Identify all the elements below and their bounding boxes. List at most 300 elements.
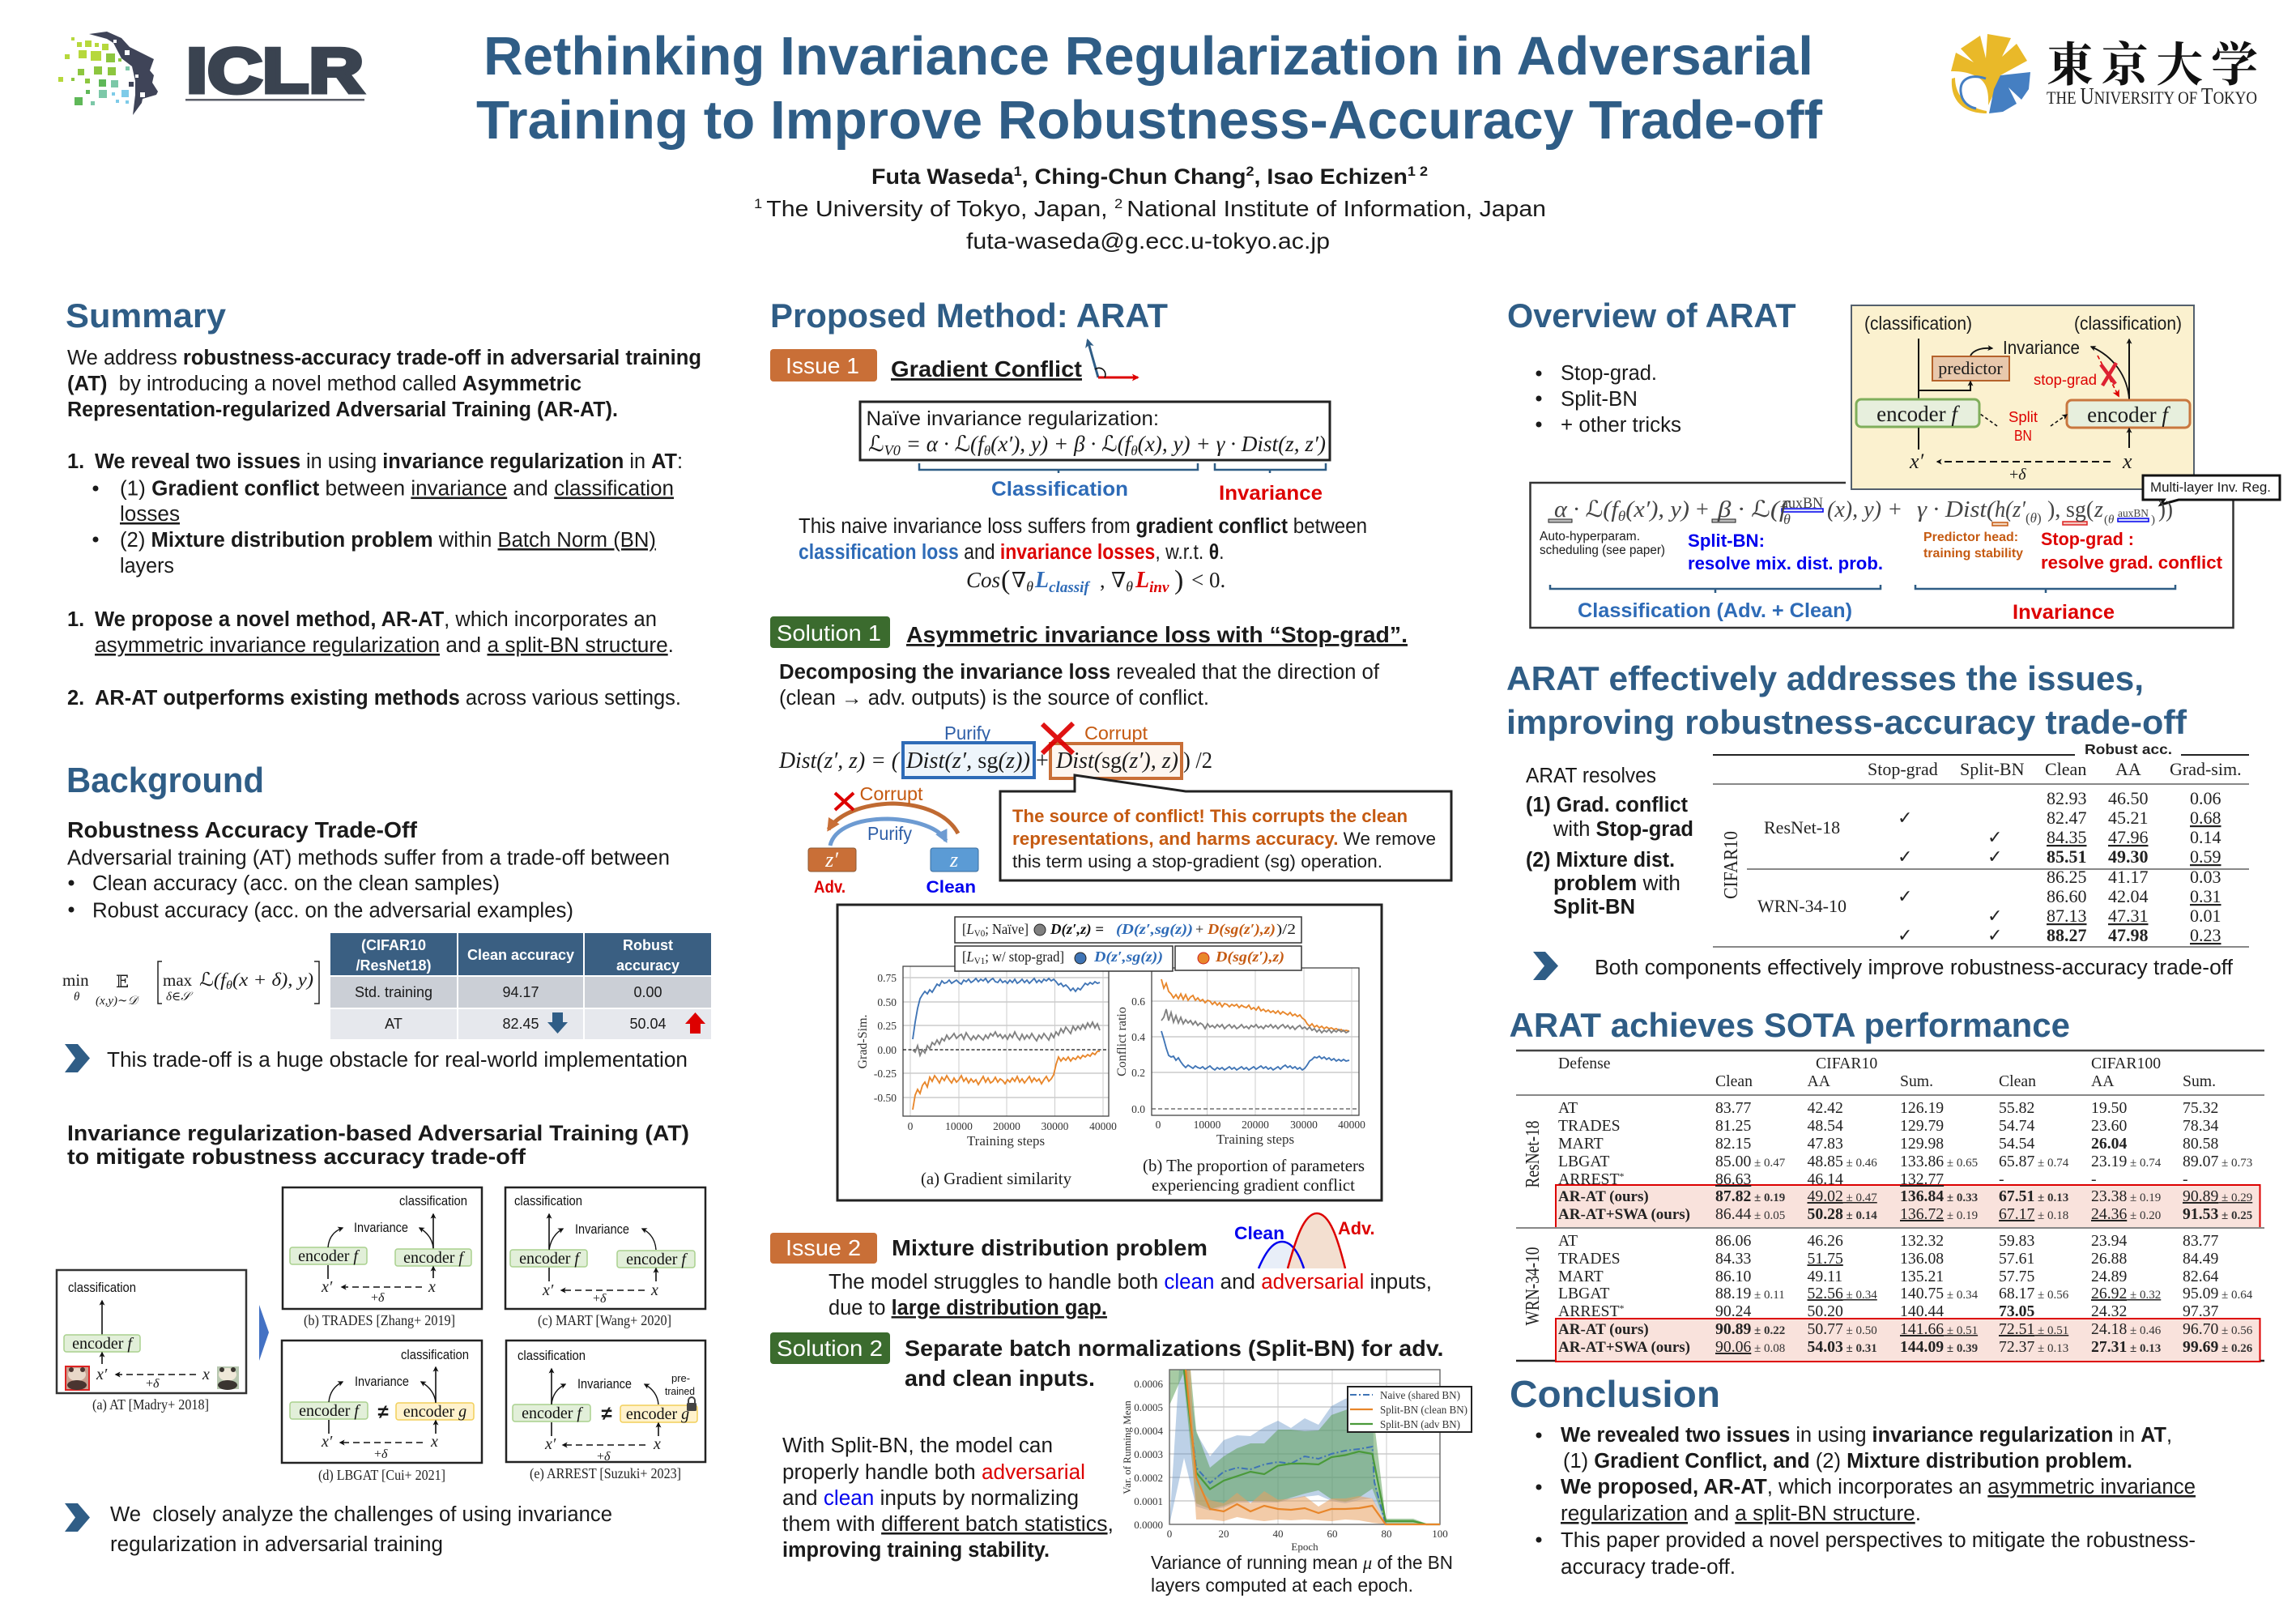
icon: conflicting gradients bbox=[1088, 340, 1138, 377]
authors: 1 bbox=[1014, 164, 1022, 179]
heading: proposed method: Proposed Method: ARAT bbox=[770, 296, 1168, 335]
chart: gradient similarity: 0.25 bbox=[877, 1020, 897, 1032]
diagram: ARAT architecture: stop-grad bbox=[2034, 372, 2097, 388]
text: gradient conflict explanation: classification loss and invariance losses, w.r.t. θ. bbox=[799, 541, 1225, 564]
table: SOTA results: 51.75 bbox=[1808, 1250, 1843, 1268]
chart: gradient similarity: 0.75 bbox=[877, 972, 897, 984]
diagram: ARAT architecture: predictor bbox=[1938, 358, 2003, 378]
text: split-bn description: With Split-BN, the model can bbox=[782, 1434, 1053, 1457]
table: ablation: 0.03 bbox=[2190, 867, 2221, 887]
formula box bbox=[1531, 483, 2234, 628]
table: SOTA results: 48.54 bbox=[1808, 1117, 1843, 1135]
callout: source of conflict: this term using a stop-gradient (sg) operation. bbox=[1012, 851, 1382, 872]
text: ARAT resolves: (2) Mixture dist. bbox=[1526, 849, 1675, 872]
table: SOTA results: ± 0.20 bbox=[2127, 1209, 2161, 1222]
diagram: corrupt and purify: Adv. bbox=[814, 878, 846, 897]
icon: clean and adversarial distributions bbox=[1234, 1213, 1375, 1268]
icon: chevron bbox=[65, 1503, 90, 1532]
text: summary body: 1. bbox=[67, 608, 84, 631]
table: clean vs robust accuracy: (CIFAR10 bbox=[361, 937, 426, 953]
diagram: (b) TRADES: encoder f bbox=[298, 1247, 360, 1265]
text: summary body: asymmetric invariance regularization and a split-BN structure . bbox=[95, 634, 674, 657]
table: SOTA results: LBGAT bbox=[1558, 1285, 1609, 1302]
formula: ARAT loss: ) bbox=[2151, 514, 2155, 526]
diagram: ARAT architecture bbox=[1851, 305, 2194, 489]
diagram: corrupt and purify: Purify bbox=[867, 823, 912, 844]
note: stop-grad: Stop-grad : bbox=[2041, 529, 2134, 549]
table: ablation: 42.04 bbox=[2108, 886, 2148, 906]
table: SOTA results: 140.75 ± 0.34 bbox=[1900, 1285, 1978, 1302]
formula: adversarial training objective: min bbox=[62, 970, 89, 990]
formula box: naive invariance regularization bbox=[860, 402, 1330, 460]
formula: ARAT loss bbox=[1548, 495, 2173, 527]
text: split-bn description: them with different batch statistics , bbox=[782, 1513, 1114, 1536]
formula: ARAT loss: γ · Dist( bbox=[1917, 497, 1996, 522]
list: tricks: Stop-grad. bbox=[1561, 362, 1657, 385]
diagram: (a) AT: (a) AT [Madry+ 2018] bbox=[92, 1396, 209, 1413]
note: stop-grad: resolve grad. conflict bbox=[2041, 552, 2223, 573]
text: ARAT resolves: (1) Grad. conflict bbox=[1526, 794, 1688, 816]
table: SOTA results: 19.50 bbox=[2091, 1099, 2127, 1117]
table: ablation: Split-BN bbox=[1960, 759, 2025, 779]
table: ablation: 0.01 bbox=[2190, 906, 2221, 926]
formula: cosine similarity: < 0. bbox=[1191, 568, 1225, 592]
text: trade-off description: Clean accuracy (acc. on the clean samples) bbox=[92, 872, 500, 895]
text: decomposition: (clean → adv. outputs) is the source of conflict. bbox=[779, 687, 1209, 710]
panel: effectiveness bbox=[1506, 659, 2249, 980]
formula: ARAT loss: auxBN bbox=[2118, 508, 2149, 520]
legend: BN variants: Split-BN (clean BN) bbox=[1380, 1404, 1467, 1416]
formula: ARAT loss: h(z′ bbox=[1995, 497, 2026, 522]
formula: decomposition of distance: ) /2 bbox=[1183, 748, 1212, 774]
diagram: (e) ARREST: encoder f bbox=[522, 1404, 583, 1422]
text: ARAT resolves: Split-BN bbox=[1553, 896, 1635, 919]
chart: conflict ratio: 0.2 bbox=[1131, 1067, 1145, 1079]
panel: overview bbox=[1507, 296, 2280, 628]
icon: red cross bbox=[1042, 723, 1073, 753]
text: gradient conflict explanation bbox=[799, 515, 1367, 564]
diagram: (c) MART: x bbox=[650, 1281, 658, 1299]
table: ablation: 84.35 bbox=[2047, 827, 2086, 847]
diagram: (a) AT bbox=[57, 1270, 246, 1413]
table: SOTA results: 86.10 bbox=[1715, 1268, 1751, 1285]
caption: variance chart: Variance of running mean μ of the BN bbox=[1151, 1552, 1453, 1573]
list: tricks: + other tricks bbox=[1561, 414, 1681, 437]
label: invariance: Invariance bbox=[2013, 601, 2115, 624]
authors: 1 2 bbox=[1408, 164, 1428, 179]
note: auto-hyperparameter: Auto-hyperparam. bbox=[1540, 530, 1640, 543]
table: SOTA results: 24.89 bbox=[2091, 1268, 2127, 1285]
diagram: (c) MART: classification bbox=[514, 1194, 582, 1208]
text: summary body: Representation-regularized Adversarial Training (AR-AT). bbox=[67, 399, 618, 421]
panel: SOTA performance bbox=[1510, 1006, 2264, 1362]
badge: solution 1 bbox=[770, 616, 890, 648]
legend: naive and stop-grad terms: D(sg(z′),z) bbox=[1215, 948, 1284, 965]
callout: multi-layer invariance regularization: Multi-layer Inv. Reg. bbox=[2150, 480, 2271, 495]
table: SOTA results: 68.17 ± 0.56 bbox=[1999, 1285, 2068, 1302]
table: SOTA results: - bbox=[2183, 1170, 2188, 1188]
formula: adversarial training objective: (x,y)∼𝒟 bbox=[96, 995, 140, 1008]
table: SOTA results: 132.77 bbox=[1900, 1170, 1944, 1188]
text: decomposition bbox=[779, 661, 1380, 710]
table: SOTA results: 97.37 bbox=[2183, 1302, 2218, 1320]
note: predictor head bbox=[1923, 531, 2023, 561]
arrow: triangle bbox=[259, 1305, 269, 1361]
formula: ARAT loss: θ bbox=[1783, 511, 1791, 527]
table: SOTA results: - bbox=[1999, 1170, 2004, 1188]
text: analysis statement: We closely analyze the challenges of using invariance bbox=[110, 1503, 612, 1526]
diagram: (e) ARREST bbox=[506, 1341, 705, 1482]
table: SOTA results: AT bbox=[1558, 1232, 1578, 1250]
table: clean vs robust accuracy: accuracy bbox=[616, 957, 679, 974]
table: ablation: 86.25 bbox=[2047, 867, 2086, 887]
formula: ARAT loss: θ bbox=[1618, 508, 1625, 524]
diagram: (c) MART: +δ bbox=[593, 1292, 607, 1306]
table: SOTA results: 72.51 ± 0.51 bbox=[1999, 1320, 2068, 1338]
chart: conflict ratio: 30000 bbox=[1290, 1119, 1318, 1131]
diagram: corrupt and purify: z′ bbox=[824, 848, 838, 872]
table: SOTA results: 75.32 bbox=[2183, 1099, 2218, 1117]
badge: issue 2 bbox=[770, 1233, 877, 1264]
table: SOTA results: ResNet-18 bbox=[1523, 1121, 1544, 1187]
table: SOTA results: AT bbox=[1558, 1099, 1578, 1117]
table: ablation: 85.51 bbox=[2047, 846, 2086, 867]
diagram: (e) ARREST: +δ bbox=[597, 1450, 611, 1464]
brace: invariance bbox=[1915, 585, 2175, 593]
logo: University of Tokyo: THE UNIVERSITY OF TOKYO bbox=[2047, 84, 2257, 109]
formula: ARAT loss: auxBN bbox=[1782, 495, 1823, 512]
formula box: naive invariance regularization: Naïve invariance regularization: bbox=[867, 407, 1159, 430]
formula: cosine similarity: ) bbox=[1174, 565, 1183, 595]
diagram: ARAT architecture: encoder f bbox=[2087, 403, 2170, 427]
diagram: (d) LBGAT: +δ bbox=[374, 1447, 388, 1461]
table: SOTA results: 27.31 ± 0.13 bbox=[2091, 1338, 2161, 1356]
text: trade-off conclusion: This trade-off is a huge obstacle for real-world implementation bbox=[107, 1049, 688, 1072]
formula: ARAT loss: (θ bbox=[2104, 514, 2115, 526]
table: ablation: ✓ bbox=[1898, 846, 1912, 867]
heading: overview: Overview of ARAT bbox=[1507, 296, 1796, 335]
text: summary body: 1. bbox=[67, 450, 84, 473]
table: SOTA results: 136.72 bbox=[1900, 1205, 1944, 1223]
list: conclusions bbox=[1536, 1424, 2196, 1579]
diagram: (a) AT: +δ bbox=[146, 1377, 160, 1391]
panel: summary bbox=[66, 296, 701, 710]
table: clean vs robust accuracy: 0.00 bbox=[633, 984, 662, 1000]
heading: conclusion: Conclusion bbox=[1510, 1373, 1720, 1415]
diagram: corrupt and purify: Clean bbox=[926, 878, 976, 897]
table: ablation: 49.30 bbox=[2108, 846, 2148, 867]
brace: invariance bbox=[1215, 463, 1326, 473]
table: SOTA results: * bbox=[1619, 1170, 1624, 1182]
badge: issue 1 bbox=[770, 349, 877, 381]
table: SOTA results: 23.38 ± 0.19 bbox=[2091, 1187, 2161, 1205]
list: conclusions: regularization and a split-BN structure. bbox=[1561, 1503, 1921, 1525]
chart: variance of running mean: 0.0003 bbox=[1134, 1448, 1163, 1460]
table: SOTA results: Sum. bbox=[2183, 1072, 2216, 1090]
logo: ICLR: ICLR bbox=[186, 35, 364, 106]
note: split-bn bbox=[1688, 531, 1883, 573]
diagram: (b) TRADES: x′ bbox=[321, 1278, 333, 1296]
chart: conflict ratio: 0.4 bbox=[1131, 1031, 1145, 1043]
table: SOTA results: 83.77 bbox=[1715, 1099, 1751, 1117]
diagram: (e) ARREST: trained bbox=[665, 1385, 695, 1397]
table: SOTA results: 86.06 bbox=[1715, 1232, 1751, 1250]
subheading: split-bn: Separate batch normalizations (Split-BN) for adv. bbox=[905, 1336, 1443, 1361]
chart: gradient similarity: Training steps bbox=[967, 1133, 1045, 1149]
badge: solution 1: Solution 1 bbox=[777, 620, 881, 646]
heading: effectiveness: ARAT effectively addresses the issues, bbox=[1506, 659, 2144, 697]
table: SOTA results: 84.49 bbox=[2183, 1250, 2218, 1268]
chart: variance of running mean: 0.0004 bbox=[1134, 1425, 1163, 1437]
brace: classification bbox=[919, 463, 1198, 473]
chart: gradient similarity: 40000 bbox=[1089, 1120, 1117, 1132]
text: ARAT resolves: ARAT resolves bbox=[1526, 765, 1656, 787]
callout: source of conflict: representations, and harms accuracy. We remove bbox=[1012, 829, 1436, 849]
table: SOTA results: MART bbox=[1558, 1268, 1604, 1285]
authors: Futa Waseda bbox=[871, 164, 1006, 189]
text: decomposition: Decomposing the invariance loss revealed that the direction of bbox=[779, 661, 1380, 684]
table: clean vs robust accuracy: Robust bbox=[623, 937, 673, 953]
text: both components: Both components effectively improve robustness-accuracy trade-off bbox=[1595, 957, 2234, 979]
table: SOTA results: 52.56 ± 0.34 bbox=[1808, 1285, 1877, 1302]
table: SOTA results: 91.53 ± 0.25 bbox=[2183, 1205, 2252, 1223]
table: SOTA results: Defense bbox=[1558, 1055, 1611, 1072]
chart: conflict ratio: 10000 bbox=[1194, 1119, 1221, 1131]
table: SOTA results: 85.00 ± 0.47 bbox=[1715, 1153, 1785, 1170]
table: SOTA results: 46.14 bbox=[1808, 1170, 1843, 1188]
table: SOTA results: 67.17 bbox=[1999, 1205, 2034, 1223]
chart: variance of running mean: 100 bbox=[1432, 1528, 1448, 1540]
table: ablation: ResNet-18 bbox=[1764, 817, 1840, 838]
chart: gradient similarity: -0.50 bbox=[874, 1092, 897, 1104]
chart: conflict ratio: 0.6 bbox=[1131, 995, 1145, 1008]
table: ablation: 82.47 bbox=[2047, 808, 2086, 828]
text: summary body: (1) Gradient conflict between invariance and classification bbox=[120, 478, 674, 501]
icon: up arrow bbox=[685, 1012, 705, 1034]
formula: decomposition of distance: Purify bbox=[944, 722, 990, 744]
icon: adversarial panda bbox=[66, 1366, 89, 1390]
table: SOTA results: 54.03 ± 0.31 bbox=[1808, 1338, 1877, 1356]
chart: variance of running mean: 0.0001 bbox=[1134, 1495, 1163, 1507]
diagram: (b) TRADES: x bbox=[428, 1278, 436, 1296]
icon: clean and adversarial distributions: Adv. bbox=[1338, 1218, 1375, 1238]
note: split-bn: resolve mix. dist. prob. bbox=[1688, 553, 1883, 573]
caption: proportion of parameters: (b) The proportion of parameters bbox=[1143, 1156, 1365, 1175]
note: split-bn: Split-BN: bbox=[1688, 531, 1765, 551]
legend: naive and stop-grad terms: )/2 bbox=[1276, 921, 1296, 938]
note: auto-hyperparameter bbox=[1540, 530, 1665, 557]
panel: proposed method bbox=[770, 296, 1472, 1596]
table: ablation: ✓ bbox=[1898, 925, 1912, 945]
chart: gradient similarity: 20000 bbox=[993, 1120, 1020, 1132]
chart: conflict ratio: 0.0 bbox=[1131, 1103, 1145, 1115]
note: auto-hyperparameter: scheduling (see paper) bbox=[1540, 543, 1665, 557]
table: SOTA results: 95.09 ± 0.64 bbox=[2183, 1285, 2252, 1302]
text: summary body bbox=[67, 347, 701, 710]
table: SOTA results: AR-AT+SWA (ours) bbox=[1558, 1206, 1690, 1223]
diagram: (a) AT: x bbox=[202, 1366, 210, 1383]
text: ARAT resolves: with Stop-grad bbox=[1553, 818, 1693, 841]
chart: gradient similarity: -0.25 bbox=[874, 1068, 897, 1080]
diagram: (e) ARREST: x bbox=[653, 1435, 661, 1453]
text: split-bn description: improving training stability. bbox=[782, 1539, 1050, 1562]
table: ablation: Clean bbox=[2045, 759, 2086, 779]
table: SOTA results: 72.37 ± 0.13 bbox=[1999, 1338, 2068, 1356]
diagram: (d) LBGAT: (d) LBGAT [Cui+ 2021] bbox=[318, 1467, 445, 1484]
icon: clean and adversarial distributions: Clean bbox=[1234, 1223, 1284, 1243]
table: ablation: ✓ bbox=[1898, 808, 1912, 828]
list: conclusions: (1) Gradient Conflict, and (2) Mixture distribution problem. bbox=[1563, 1450, 2132, 1473]
table: SOTA results: 49.11 bbox=[1808, 1268, 1842, 1285]
affiliations: 2 bbox=[1114, 196, 1127, 211]
chart: conflict ratio: 20000 bbox=[1242, 1119, 1269, 1131]
table: SOTA results: 99.69 ± 0.26 bbox=[2183, 1338, 2252, 1356]
heading: SOTA: ARAT achieves SOTA performance bbox=[1510, 1006, 2070, 1044]
chart: variance of running mean: 20 bbox=[1218, 1528, 1229, 1540]
table: SOTA results: 57.61 bbox=[1999, 1250, 2034, 1268]
table: ablation: 88.27 bbox=[2047, 925, 2086, 945]
table: ablation: 47.98 bbox=[2108, 925, 2148, 945]
subheading: invariance regularization: Invariance regularization-based Adversarial Training (AT) bbox=[67, 1121, 689, 1145]
formula: adversarial training objective: ℒ(f bbox=[199, 970, 225, 991]
formula box: naive invariance regularization: ℒ bbox=[868, 432, 884, 457]
table: SOTA results: AA bbox=[1808, 1072, 1831, 1090]
table: SOTA results: 50.20 bbox=[1808, 1302, 1843, 1320]
legend: naive and stop-grad terms: [L bbox=[962, 948, 975, 965]
diagram: (e) ARREST: x′ bbox=[544, 1435, 556, 1453]
formula: decomposition of distance: Dist(sg(z′), z) bbox=[1055, 748, 1178, 774]
label: classification adv + clean: Classification (Adv. + Clean) bbox=[1578, 599, 1852, 622]
heading: background: Background bbox=[66, 761, 264, 800]
formula: ARAT loss: β · ℒ(f bbox=[1717, 496, 1790, 522]
table: SOTA results: 47.83 bbox=[1808, 1135, 1843, 1153]
formula: ARAT loss: (x), y) bbox=[1827, 497, 1881, 522]
logo: University of Tokyo: 東京大学 bbox=[2047, 27, 2258, 95]
table: ablation: ✓ bbox=[1987, 846, 2002, 867]
table: ablation: WRN-34-10 bbox=[1757, 896, 1847, 916]
table: SOTA results: 96.70 ± 0.56 bbox=[2183, 1320, 2252, 1338]
text: summary body: AR-AT outperforms existing methods across various settings. bbox=[95, 687, 681, 710]
text: ARAT resolves bbox=[1526, 765, 1693, 919]
table: SOTA results: 24.32 bbox=[2091, 1302, 2127, 1320]
table: SOTA results: 57.75 bbox=[1999, 1268, 2034, 1285]
caption: variance chart bbox=[1151, 1552, 1453, 1596]
table: SOTA results: 50.77 ± 0.50 bbox=[1808, 1320, 1877, 1338]
diagram: ARAT architecture: encoder f bbox=[1876, 402, 1960, 426]
badge: issue 1: Issue 1 bbox=[786, 353, 859, 378]
table: ablation: ✓ bbox=[1987, 906, 2002, 926]
table: ablation: 47.31 bbox=[2108, 906, 2148, 926]
text: trade-off description bbox=[67, 847, 670, 922]
panel: background bbox=[57, 761, 711, 1556]
diagram: (c) MART: (c) MART [Wang+ 2020] bbox=[538, 1312, 671, 1329]
table: ablation: ✓ bbox=[1987, 827, 2002, 847]
chart: gradient similarity: Grad-Sim. bbox=[856, 1014, 870, 1069]
table: ablation: 46.50 bbox=[2108, 788, 2148, 808]
formula: cosine similarity: L bbox=[1135, 568, 1149, 593]
table: SOTA results: 23.19 ± 0.74 bbox=[2091, 1153, 2161, 1170]
diagram: ARAT architecture: Invariance bbox=[2003, 337, 2080, 358]
diagram: (c) MART: Invariance bbox=[575, 1222, 629, 1237]
formula: cosine similarity: ∇ bbox=[1111, 569, 1126, 592]
table: SOTA results: 135.21 bbox=[1900, 1268, 1944, 1285]
email: futa-waseda@g.ecc.u-tokyo.ac.jp bbox=[966, 228, 1330, 254]
formula: cosine similarity: , bbox=[1100, 569, 1105, 592]
table: ablation: 41.17 bbox=[2108, 867, 2148, 887]
brace: classification adv + clean bbox=[1550, 585, 1881, 593]
badge: solution 2 bbox=[770, 1332, 890, 1364]
table: SOTA results: ± 0.08 bbox=[1751, 1342, 1785, 1355]
chart: variance of running mean: 0.0002 bbox=[1134, 1472, 1163, 1484]
callout: multi-layer invariance regularization bbox=[2143, 475, 2280, 505]
note: predictor head: training stability bbox=[1923, 547, 2023, 561]
table: SOTA results: 136.08 bbox=[1900, 1250, 1944, 1268]
legend: naive and stop-grad terms: ; w/ stop-grad] bbox=[985, 948, 1064, 965]
subheading: gradient conflict: Gradient Conflict bbox=[891, 356, 1082, 381]
table: SOTA results: Clean bbox=[1715, 1072, 1753, 1090]
table: SOTA results: 89.07 ± 0.73 bbox=[2183, 1153, 2252, 1170]
table: SOTA results: 136.84 ± 0.33 bbox=[1900, 1187, 1978, 1205]
table: SOTA results: 86.44 ± 0.05 bbox=[1715, 1205, 1785, 1223]
table: SOTA results: WRN-34-10 bbox=[1523, 1247, 1544, 1325]
icon: chevron bbox=[65, 1044, 90, 1072]
formula: cosine similarity: inv bbox=[1149, 579, 1169, 596]
affiliations: 1 bbox=[754, 196, 766, 211]
formula box: naive invariance regularization: ℒ(f bbox=[954, 432, 984, 457]
subheading: invariance regularization bbox=[67, 1121, 689, 1169]
text: mixture problem: due to large distribution gap. bbox=[829, 1297, 1107, 1319]
table: ablation: 0.14 bbox=[2190, 827, 2221, 847]
chart: conflict ratio: 40000 bbox=[1338, 1119, 1365, 1131]
subheading: invariance regularization: to mitigate robustness accuracy trade-off bbox=[67, 1144, 526, 1169]
subheading: trade-off: Robustness Accuracy Trade-Off bbox=[67, 817, 418, 842]
text: ARAT resolves: problem with bbox=[1553, 872, 1680, 895]
table: SOTA results: 141.66 ± 0.51 bbox=[1900, 1320, 1978, 1338]
chart: variance of running mean: 80 bbox=[1382, 1528, 1391, 1540]
chart: variance of running mean: 0.0006 bbox=[1134, 1378, 1163, 1390]
table: SOTA results: 73.05 bbox=[1999, 1302, 2034, 1320]
formula: ARAT loss: )) bbox=[2158, 497, 2173, 522]
formula: ARAT loss: ), bbox=[2047, 497, 2060, 522]
text: split-bn description bbox=[782, 1434, 1114, 1562]
formula box: naive invariance regularization: V0 bbox=[884, 442, 901, 458]
chart: variance of running mean: 40 bbox=[1273, 1528, 1283, 1540]
table: SOTA results: 129.98 bbox=[1900, 1135, 1944, 1153]
table: SOTA results: 82.64 bbox=[2183, 1268, 2218, 1285]
diagram: (b) TRADES: encoder f bbox=[403, 1249, 465, 1267]
legend: naive and stop-grad terms: V1 bbox=[974, 955, 985, 966]
table: SOTA results: Clean bbox=[1999, 1072, 2036, 1090]
diagram: (d) LBGAT: x bbox=[430, 1433, 438, 1451]
table: SOTA results: 90.06 bbox=[1715, 1338, 1751, 1356]
diagram: (d) LBGAT bbox=[282, 1341, 482, 1484]
table: SOTA results: Sum. bbox=[1900, 1072, 1933, 1090]
diagram: (d) LBGAT: ≠ bbox=[377, 1401, 389, 1423]
table: ablation: 45.21 bbox=[2108, 808, 2148, 828]
table: ablation: 0.23 bbox=[2190, 925, 2221, 945]
subheading: stop-grad: Asymmetric invariance loss with “Stop-grad”. bbox=[906, 622, 1408, 647]
table: SOTA results: AR-AT (ours) bbox=[1558, 1188, 1649, 1205]
list: conclusions: This paper provided a novel perspectives to mitigate the robustness- bbox=[1561, 1529, 2196, 1552]
chart: conflict ratio: Conflict ratio bbox=[1115, 1007, 1129, 1076]
diagram: (d) LBGAT: x′ bbox=[321, 1433, 333, 1451]
legend: naive and stop-grad terms: (D(z′,sg(z)) bbox=[1116, 921, 1193, 938]
diagram: ARAT architecture: +δ bbox=[2009, 466, 2026, 484]
legend: naive and stop-grad terms: D(z′,sg(z)) bbox=[1093, 948, 1163, 965]
diagram: (e) ARREST: classification bbox=[518, 1349, 586, 1363]
table: clean vs robust accuracy: 82.45 bbox=[502, 1016, 539, 1032]
formula: ARAT loss: + bbox=[1696, 497, 1709, 522]
